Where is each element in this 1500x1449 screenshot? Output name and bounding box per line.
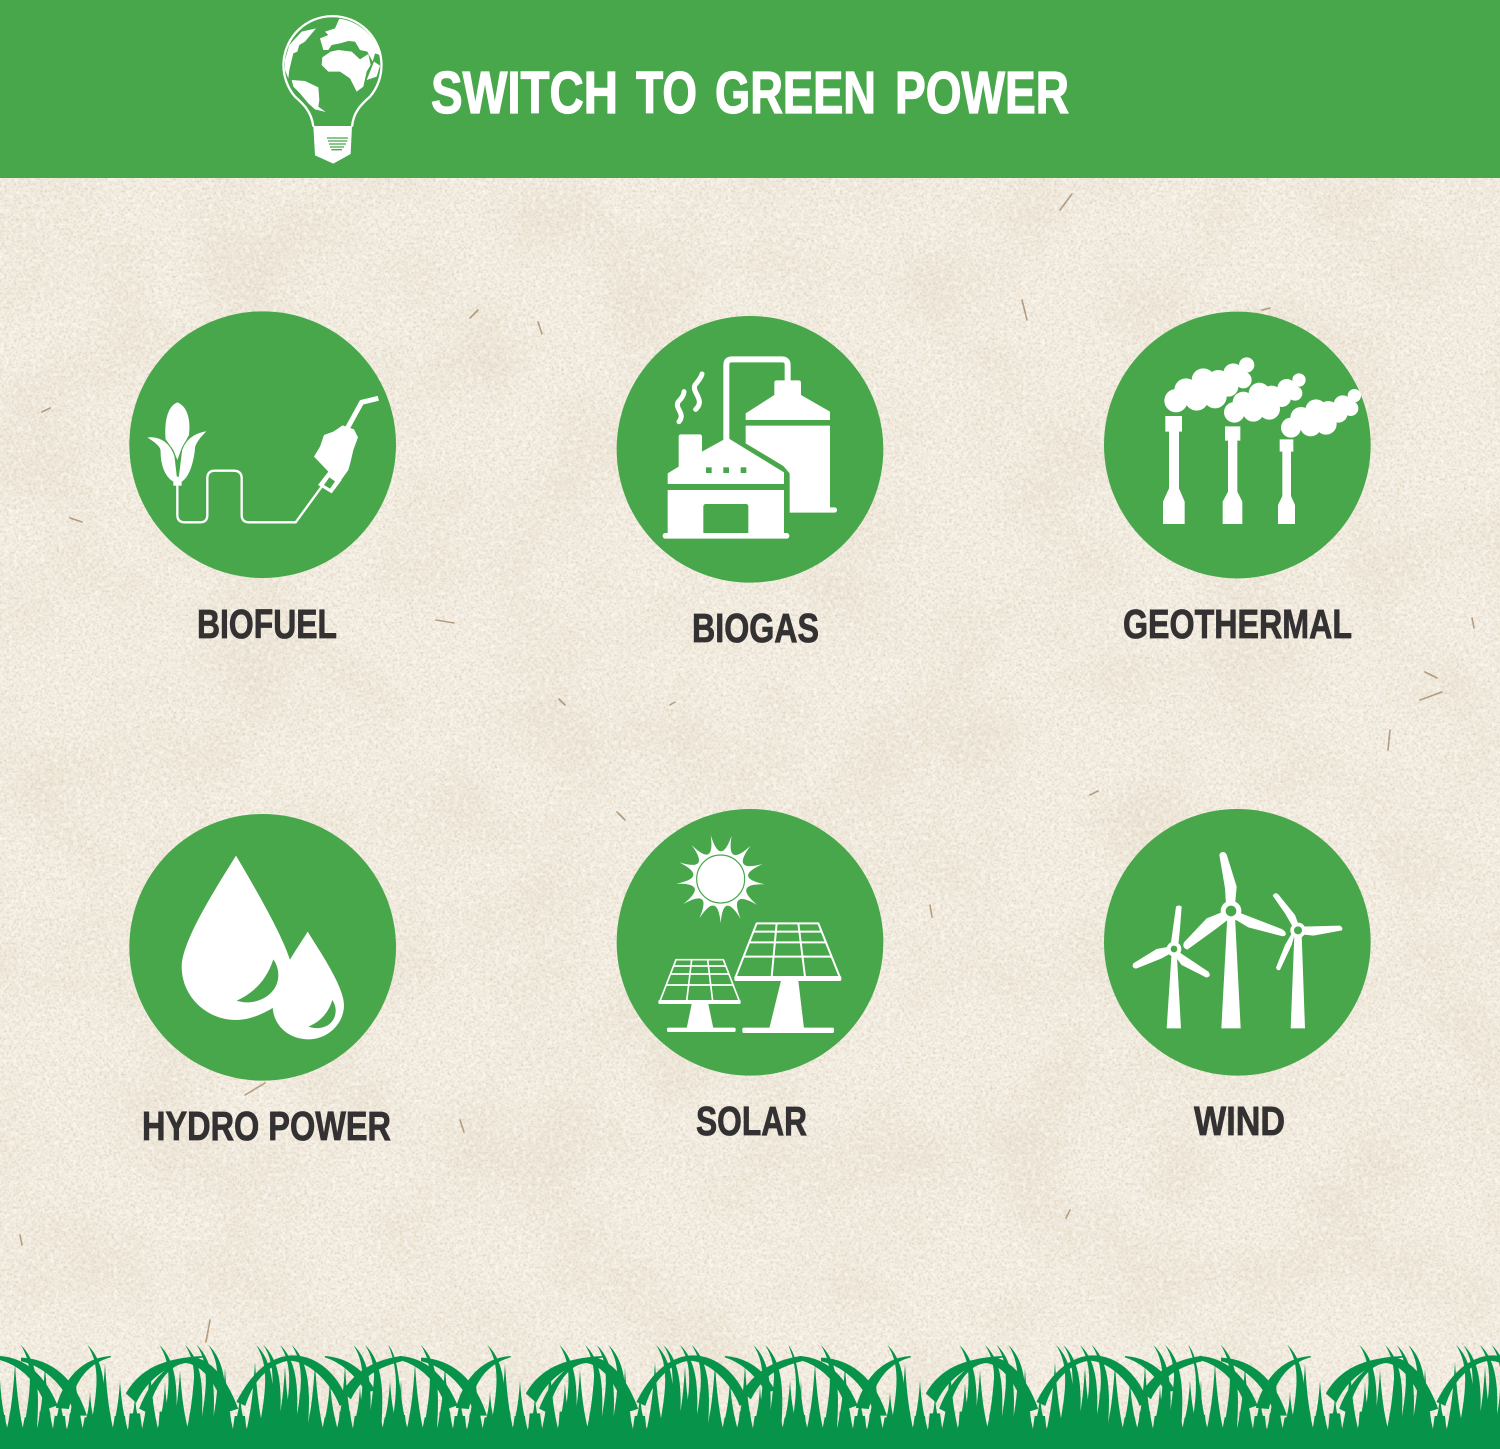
label: biofuel: BIOFUEL (197, 601, 337, 647)
title: SWITCH (431, 60, 618, 126)
header band (0, 0, 1500, 178)
icon: globe light bulb (283, 16, 381, 164)
panel: geothermal (1104, 312, 1371, 647)
panel: biogas (617, 316, 883, 651)
label: geothermal: GEOTHERMAL (1123, 601, 1352, 647)
panel: wind (1104, 809, 1371, 1144)
icon: biogas plant (617, 316, 883, 583)
icon: geothermal stacks (1104, 312, 1371, 578)
label: biogas: BIOGAS (692, 605, 819, 651)
panel: solar (617, 809, 883, 1144)
icon: water drops (129, 814, 396, 1081)
title (431, 60, 1069, 126)
icon: biofuel circle (129, 311, 396, 578)
label: wind: WIND (1194, 1098, 1285, 1144)
label: solar: SOLAR (696, 1098, 807, 1144)
label: hydro power: HYDRO POWER (142, 1103, 391, 1149)
icon: sun and solar panels (617, 809, 883, 1076)
panel: biofuel (129, 311, 396, 647)
icon: wind turbines (1104, 809, 1371, 1076)
grass strip (0, 1345, 1500, 1449)
title: POWER (895, 60, 1069, 126)
panel: hydro power (129, 814, 396, 1149)
title: TO (636, 60, 697, 126)
title: GREEN (715, 60, 876, 126)
